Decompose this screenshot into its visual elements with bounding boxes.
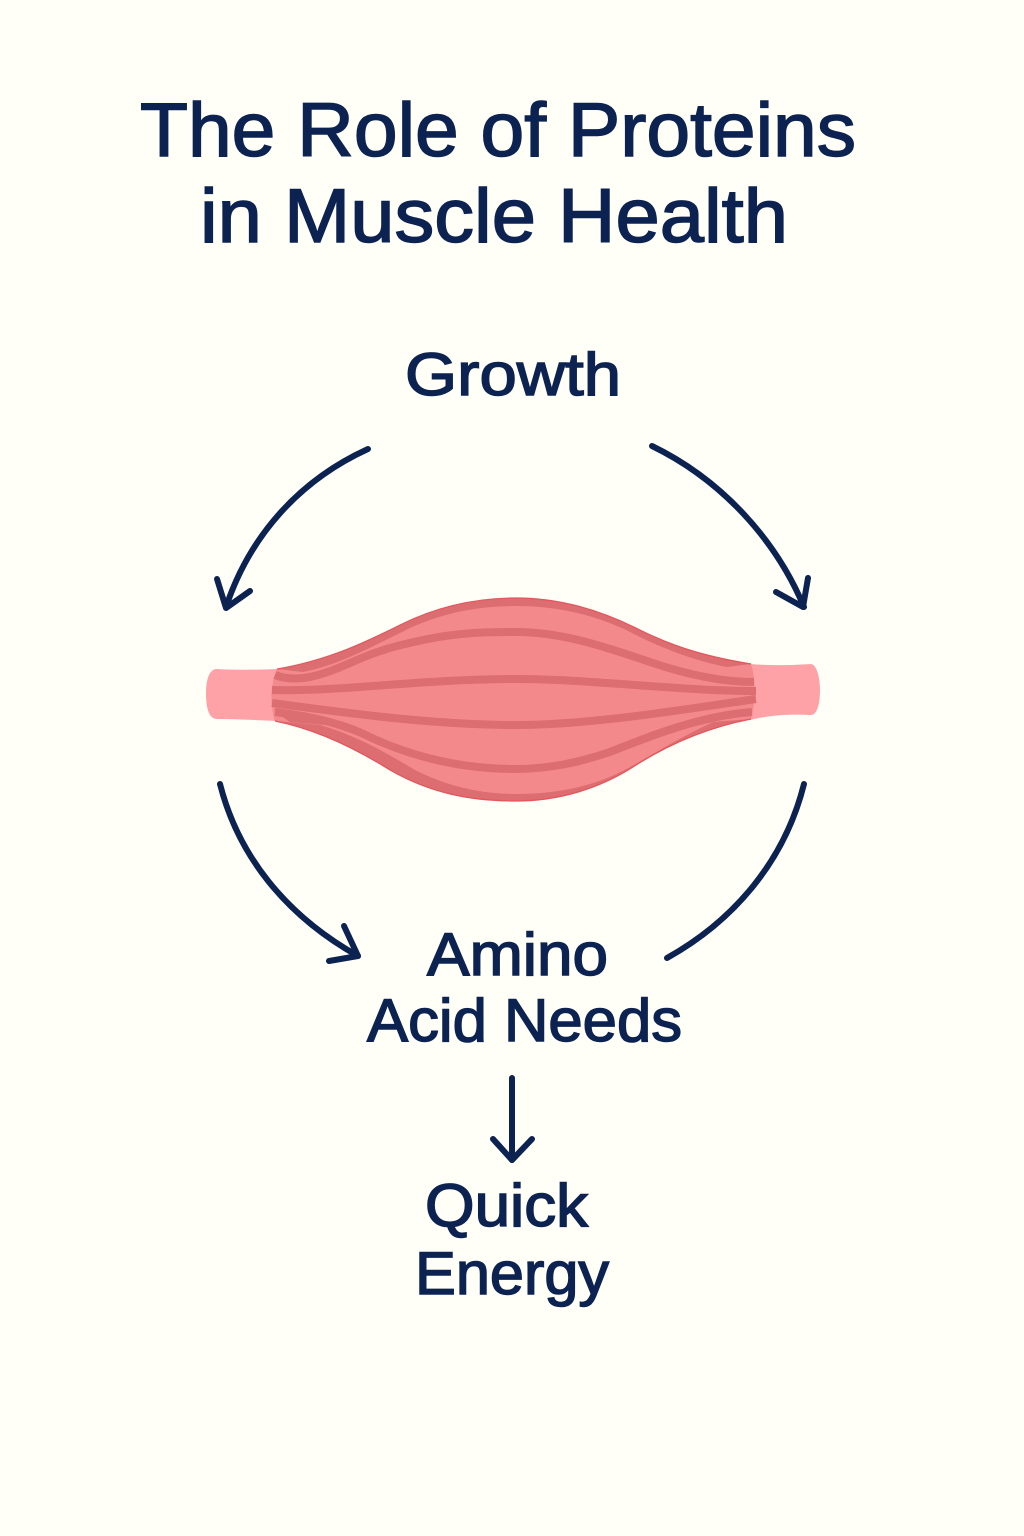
connector: amino acid needs to muscle xyxy=(667,784,804,958)
label: amino acid needs: Acid Needs xyxy=(367,987,682,1054)
top outer band xyxy=(277,598,751,672)
arrow: muscle to amino acid needs xyxy=(220,784,358,961)
muscle illustration xyxy=(206,598,820,801)
muscle fibres xyxy=(272,598,756,801)
bottom outer band xyxy=(275,719,751,801)
label: amino acid needs xyxy=(367,921,682,1054)
title: The Role of Proteins xyxy=(140,88,856,173)
arrow: down to quick energy xyxy=(493,1078,532,1160)
label: quick energy xyxy=(415,1172,609,1307)
label: growth: Growth xyxy=(405,341,621,408)
arrow: growth to right of muscle xyxy=(652,446,808,607)
label: quick energy: Energy xyxy=(415,1240,609,1307)
belly outline xyxy=(275,598,751,801)
muscle belly xyxy=(271,598,755,801)
label: amino acid needs: Amino xyxy=(427,921,608,988)
arrow: growth to left of muscle xyxy=(217,449,368,608)
title: in Muscle Health xyxy=(200,174,788,259)
title xyxy=(140,88,856,259)
left tendon xyxy=(206,669,277,721)
right tendon xyxy=(750,664,820,720)
label: quick energy: Quick xyxy=(425,1172,589,1239)
